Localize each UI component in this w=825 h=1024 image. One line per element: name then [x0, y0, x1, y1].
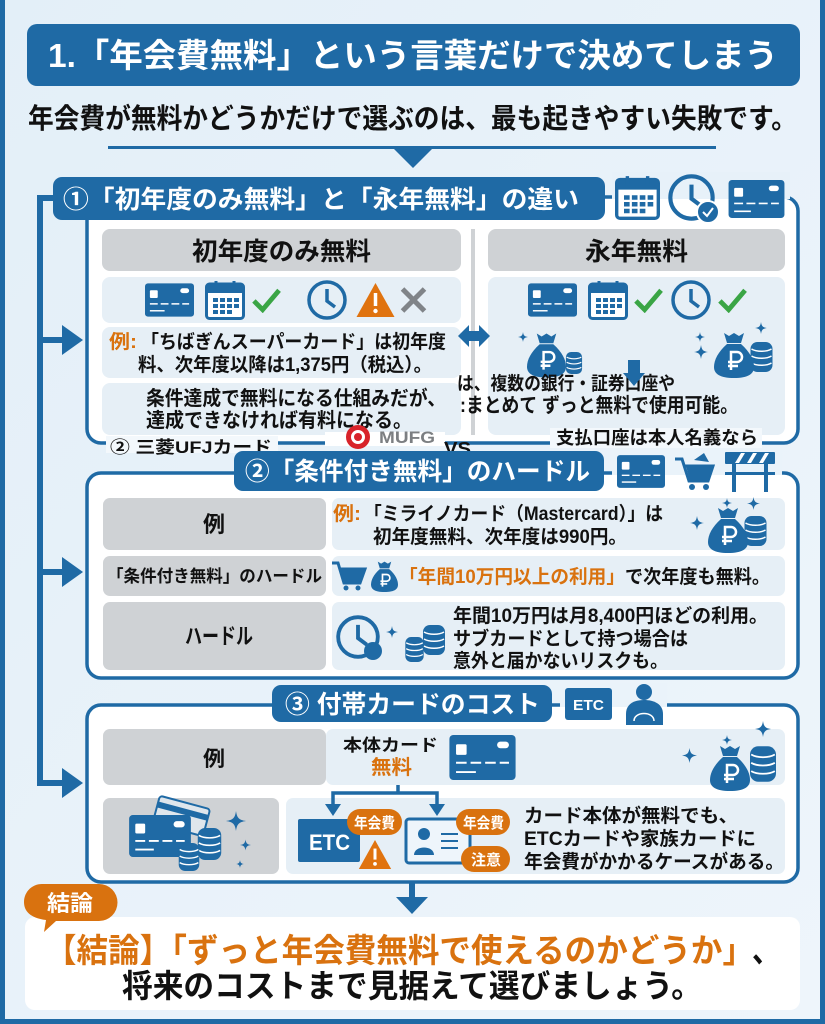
section 2 header: [234, 451, 604, 491]
arrow: to conclusion: [396, 882, 428, 914]
left rail with arrows: [37, 195, 83, 798]
section 3 header: ③ 付帯カードのコスト: [285, 691, 540, 719]
icon: cart: [675, 453, 713, 490]
row: main card: [103, 721, 785, 791]
conclusion text: [45, 932, 780, 1004]
conclusion text: 【結論】「ずっと年会費無料で使えるのかどうか」: [45, 932, 754, 969]
label: VS: VS: [444, 439, 471, 459]
family card: 年会費: [463, 814, 504, 832]
section 1 header: [53, 177, 605, 220]
left column: first year only: [102, 229, 461, 435]
row: hurdle condition: で次年度も無料。: [625, 565, 770, 588]
header icons: [560, 683, 667, 725]
ETC card: [298, 809, 402, 869]
example text: 「ちばぎんスーパーカード」は初年度: [141, 330, 446, 353]
section 3 header: [272, 685, 552, 722]
panel: section 1: [53, 172, 798, 443]
panel: section 3: [87, 683, 798, 882]
family card: 注意: [471, 851, 501, 869]
section 1 header: ①「初年度のみ無料」と「永年無料」の違い: [63, 186, 579, 214]
conclusion text: 将来のコストまで見据えて選びましょう。: [122, 968, 702, 1004]
row: hurdle condition: [103, 556, 785, 596]
right column: permanent free: [457, 229, 785, 435]
permanent free text: は、複数の銀行・証券口座や: [457, 373, 675, 394]
arrow: down: [623, 360, 645, 386]
connector arrows: [325, 785, 445, 816]
section 2 header: ②「条件付き無料」のハードル: [245, 458, 590, 486]
title: 1.「年会費無料」という言葉だけで決めてしまう: [48, 37, 778, 74]
logo: MUFG: [325, 428, 445, 447]
header icons: ETC: [573, 697, 604, 714]
row: example: [103, 497, 785, 553]
example text: [102, 327, 461, 378]
icon: barrier: [725, 452, 775, 492]
condition text: 達成できなければ有料になる。: [146, 408, 412, 432]
badge: conclusion: [24, 884, 118, 932]
icon: money bag: [682, 721, 776, 791]
arrow: subtitle to sections: [108, 146, 716, 168]
panel: conclusion: [24, 884, 800, 1010]
row: hurdle condition: 「年間10万円以上の利用」: [399, 565, 625, 588]
row: main card: 本体カード: [343, 736, 438, 755]
accessory card text: [524, 804, 784, 873]
icon panel: cards and coins: [103, 796, 279, 874]
row: example: 初年度無料、次年度は990円。: [373, 525, 627, 548]
condition text: [102, 383, 461, 435]
ETC card: ETC: [309, 830, 350, 855]
heading: permanent free: 永年無料: [585, 238, 688, 266]
conclusion text: 、: [752, 932, 780, 969]
accessory card text: カード本体が無料でも、: [524, 804, 738, 827]
icon: money bag right: [694, 322, 772, 378]
heading: first year only: [102, 229, 461, 271]
heading: first year only: 初年度のみ無料: [192, 238, 371, 266]
hurdle text: 意外と届かないリスクも。: [453, 650, 668, 672]
icon row: [528, 281, 745, 318]
example text: 例:: [109, 331, 137, 353]
row: example: 例: [203, 512, 225, 537]
permanent free text: :まとめて ずっと無料で使用可能。: [460, 394, 738, 417]
icon: money bag left: [518, 332, 582, 377]
accessory card text: ETCカードや家族カードに: [524, 828, 756, 850]
header icons: [612, 448, 782, 492]
heading: permanent free: [488, 229, 785, 271]
permanent free text: [457, 373, 738, 417]
icon: money bag: [690, 497, 766, 553]
condition text: 条件達成で無料になる仕組みだが、: [146, 386, 446, 410]
panel: section 2: [87, 448, 798, 678]
family card: [406, 809, 510, 872]
example text: 料、次年度以降は1,375円（税込）。: [138, 353, 432, 376]
hurdle text: サブカードとして持つ場合は: [453, 627, 688, 650]
label: Mitsubishi UFJ card: ② 三菱UFJカード: [110, 438, 272, 457]
row: hurdle: [103, 602, 785, 672]
divider: [471, 229, 475, 435]
icon: clock and coins: [338, 617, 445, 662]
row: example: 「ミライノカード（Mastercard）」は: [364, 503, 663, 525]
icon: dollar bag: [371, 562, 398, 592]
label: payment account: 支払口座は本人名義なら: [556, 428, 758, 448]
header icons: [612, 172, 790, 223]
row: hurdle: ハードル: [185, 624, 253, 649]
ETC card: 年会費: [354, 814, 395, 832]
badge: conclusion: 結論: [47, 891, 93, 916]
icon row: [102, 277, 461, 323]
arrow: double: [458, 325, 490, 347]
title: [27, 24, 800, 86]
icon: cart small: [332, 563, 365, 590]
hurdle text: 年間10万円は月8,400円ほどの利用。: [453, 604, 768, 627]
row: hurdle condition: 「条件付き無料」のハードル: [107, 566, 322, 586]
hurdle text: [453, 604, 768, 672]
row: example: 例:: [333, 503, 361, 525]
logo: MUFG: MUFG: [379, 428, 435, 447]
row: main card: 無料: [371, 756, 412, 779]
row: main card: 例: [203, 748, 225, 771]
row: additional card fees: [286, 785, 785, 874]
accessory card text: 年会費がかかるケースがある。: [524, 850, 784, 873]
